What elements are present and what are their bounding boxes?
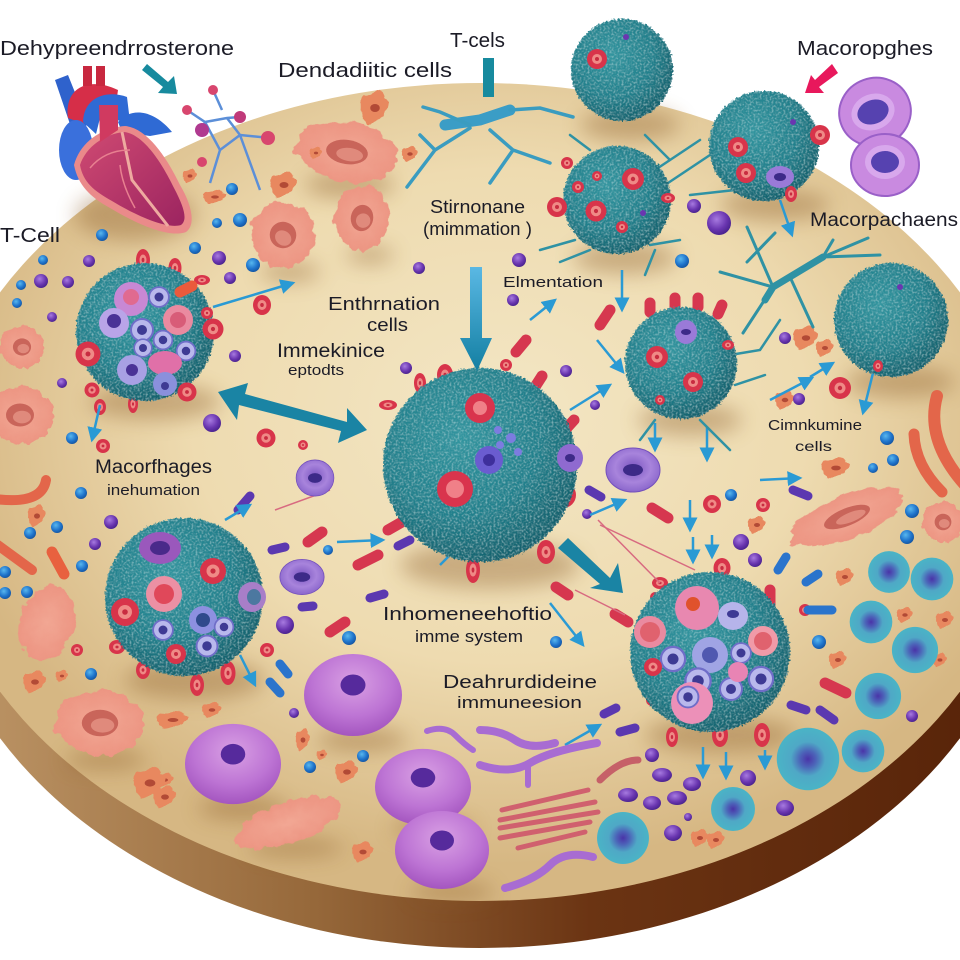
molecule dots purple [34, 199, 918, 841]
arrow: T-cels [483, 58, 494, 97]
label: Stimulation [423, 197, 532, 239]
label: Deahrurdideine immuneesion: Deahrurdideine [443, 672, 597, 692]
label: Elmentation: Elmentation [503, 274, 603, 291]
large arrow: lower right [558, 538, 623, 593]
purple ribbon strands [427, 729, 638, 888]
label: Macrophages top: Macoropghes [797, 38, 933, 60]
thin blue arrows [92, 200, 873, 778]
capsule molecules [238, 298, 846, 732]
red receptor molecules [71, 249, 851, 747]
label: Inhomeneehoftio immune system [383, 604, 552, 646]
label: Inhomeneehoftio immune system: Inhomeneehoftio [383, 604, 552, 624]
label: Enthmation cells [328, 294, 440, 335]
label: Deahrurdideine immuneesion [443, 672, 597, 712]
thin red leader lines [275, 490, 695, 615]
teal cell: far right [834, 263, 948, 377]
label: inflammation: inehumation [107, 482, 200, 499]
tissue fragments [0, 94, 960, 860]
teal cell: central [383, 368, 583, 562]
teal cell: left lower [105, 518, 266, 676]
teal cell: mid right [625, 307, 737, 419]
label: Inhomeneehoftio immune system: imme system [415, 627, 523, 646]
label: Dehydroepiandrosterone: Dehypreendrrosterone [0, 38, 234, 60]
label: Enthmation cells: Enthrnation [328, 294, 440, 314]
dendritic cell: top [407, 107, 573, 187]
teal cell: top [571, 19, 673, 121]
label: Dendritic cells: Dendadiitic cells [278, 60, 452, 82]
label: Stimulation: (mimmation ) [423, 219, 532, 239]
label: Enthmation cells: cells [367, 315, 408, 335]
label: Macrophages right: Macorpachaens [810, 210, 958, 231]
dendrites around upper-middle cell [540, 135, 780, 450]
red tubular fragments [0, 396, 960, 574]
label: Cimnkumine cells: cells [795, 438, 832, 454]
arrow: macrophages [805, 64, 838, 93]
molecule dots blue [0, 183, 919, 773]
label: Cimnkumine cells: Cimnkumine [768, 417, 862, 434]
dendritic cell: right [720, 227, 880, 333]
label: T-Cell: T-Cell [0, 225, 60, 247]
lilac cells [280, 448, 660, 595]
label: Stimulation: Stirnonane [430, 197, 525, 217]
molecule network icon [182, 85, 275, 190]
large double arrow [218, 383, 367, 443]
macrophage cells: top right [830, 68, 920, 196]
label: T-cels: T-cels [450, 30, 505, 52]
label: Macrofhages: Macorfhages [95, 457, 212, 478]
cell shadows [65, 109, 955, 902]
large teal arrow: vertical [460, 267, 492, 371]
icon: heart [55, 66, 192, 234]
label: Cimnkumine cells [768, 417, 862, 454]
label: Immekinice: Immekinice [277, 341, 385, 362]
teal cell: right lower [630, 572, 790, 732]
small teal cells: lower right [597, 551, 953, 864]
purple disc cells [185, 654, 489, 889]
label: eptods: eptodts [288, 362, 344, 379]
teal cell: upper right [709, 91, 830, 202]
teal cell: upper middle [547, 146, 675, 254]
teal cell: left upper [76, 263, 224, 402]
arrow: heart to molecule [142, 64, 177, 94]
label: Deahrurdideine immuneesion: immuneesion [457, 693, 582, 712]
